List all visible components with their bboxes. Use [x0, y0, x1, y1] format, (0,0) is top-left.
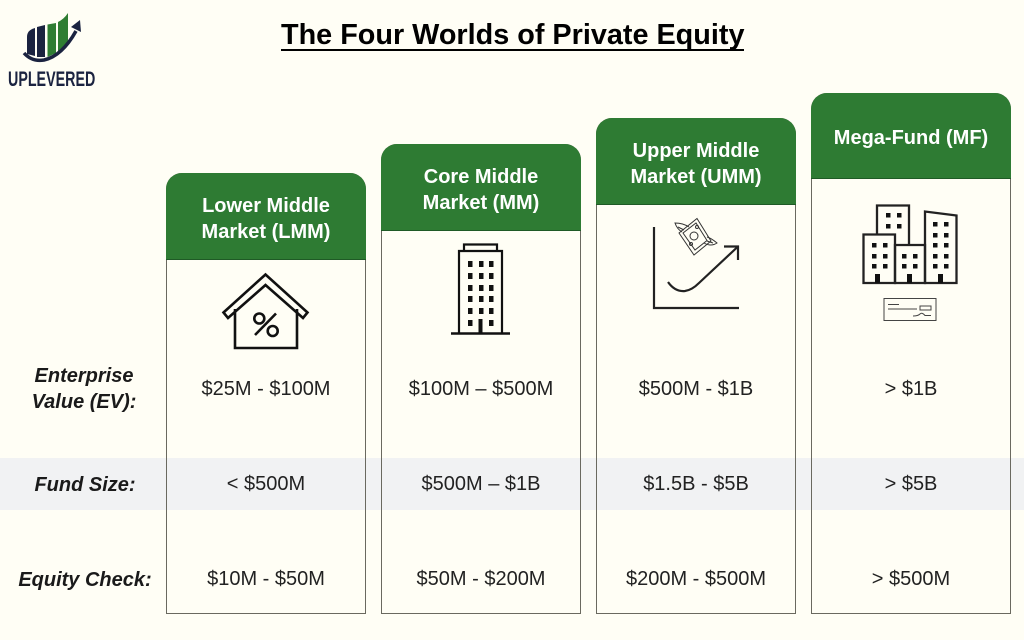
- heading: mega-fund: [811, 93, 1011, 179]
- icon: logo bars and arrow: [22, 13, 81, 62]
- value: UMM fund size: $1.5B - $5B: [643, 473, 749, 495]
- value: MM fund size: $500M – $1B: [422, 473, 540, 495]
- icon: growth chart with flying money: [652, 218, 740, 310]
- value: MF fund size: > $5B: [885, 473, 937, 495]
- value: LMM enterprise value: $25M - $100M: [202, 378, 330, 400]
- row label: enterprise value: Enterprise: [35, 365, 133, 387]
- logo: Uplevered: [8, 13, 95, 91]
- heading: upper middle market: Market (UMM): [630, 166, 762, 188]
- row label: enterprise value: [32, 365, 136, 413]
- icon: office tower: [451, 243, 510, 335]
- heading: lower middle market: Lower Middle: [202, 194, 330, 216]
- value: MF equity check: > $500M: [872, 568, 950, 590]
- row label: fund size: Fund Size:: [34, 474, 136, 496]
- logo wordmark: UPLEVERED: [8, 68, 95, 91]
- panel: lower middle market: [166, 173, 366, 614]
- horizontal band: fund size row: [0, 458, 1024, 510]
- value: MM enterprise value: $100M – $500M: [409, 378, 553, 400]
- icon: city buildings and cheque: [862, 204, 958, 321]
- icon: house with percent: [222, 272, 310, 350]
- panel: mega-fund: [811, 93, 1011, 614]
- value: UMM equity check: $200M - $500M: [626, 568, 766, 590]
- row label: enterprise value: Value (EV):: [32, 391, 136, 413]
- row label: equity check: Equity Check:: [18, 569, 152, 591]
- value: MF enterprise value: > $1B: [885, 378, 937, 400]
- heading: core middle market: Market (MM): [423, 192, 539, 214]
- panel: core middle market: [381, 144, 581, 614]
- heading: upper middle market: Upper Middle: [633, 140, 759, 162]
- value: UMM enterprise value: $500M - $1B: [639, 378, 753, 400]
- heading: mega-fund: Mega-Fund (MF): [834, 127, 988, 149]
- heading: upper middle market: [596, 118, 796, 205]
- value: LMM fund size: < $500M: [227, 473, 305, 495]
- panel: upper middle market: [596, 118, 796, 614]
- value: MM equity check: $50M - $200M: [417, 568, 545, 590]
- heading: lower middle market: Market (LMM): [202, 220, 330, 242]
- heading: lower middle market: [166, 173, 366, 260]
- title: The Four Worlds of Private Equity: [281, 19, 744, 51]
- value: LMM equity check: $10M - $50M: [207, 568, 325, 590]
- heading: core middle market: Core Middle: [424, 166, 538, 188]
- heading: core middle market: [381, 144, 581, 231]
